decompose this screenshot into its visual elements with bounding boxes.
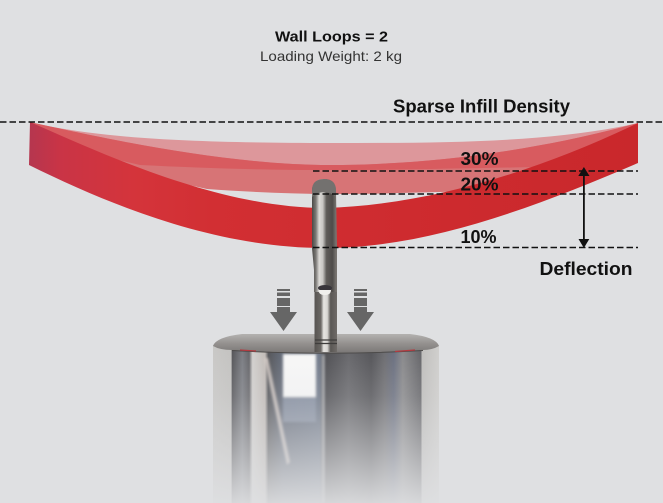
ribbon: 10% infill deflection (29, 122, 638, 248)
arrow: left load (270, 289, 297, 331)
ribbon: 20% infill deflection (30, 122, 638, 194)
dashed reference lines (0, 122, 662, 248)
label: 20%: 20% (460, 174, 498, 194)
label: 30%: 30% (460, 149, 498, 169)
arrow: right load (347, 289, 374, 331)
weight body (213, 345, 439, 503)
20% line (313, 193, 638, 195)
30% line (313, 170, 638, 172)
arrow: deflection measure (578, 167, 590, 248)
ribbon overlap (32, 122, 638, 170)
10% line (313, 246, 638, 248)
hook upper bar (312, 179, 337, 292)
hook (312, 179, 337, 352)
zero deflection line (0, 121, 662, 123)
weight top cap (213, 334, 439, 353)
hook collar (315, 340, 337, 344)
subtitle: Loading Weight: 2 kg (260, 48, 402, 64)
label: sparse infill density: Sparse Infill Density (393, 96, 570, 116)
weight rim line (232, 350, 423, 353)
weight (205, 334, 450, 503)
label: deflection: Deflection (540, 259, 632, 279)
hook latch (318, 290, 331, 295)
weight reflections (264, 354, 324, 503)
weight rim glints (240, 350, 415, 352)
hook latch notch (318, 285, 332, 291)
label: 10%: 10% (460, 227, 496, 247)
weight fade (205, 350, 450, 503)
hook lower shaft (314, 292, 337, 352)
ribbon: 30% infill deflection (30, 122, 638, 170)
title: Wall Loops = 2 (275, 28, 388, 46)
hook top shade (312, 179, 336, 197)
